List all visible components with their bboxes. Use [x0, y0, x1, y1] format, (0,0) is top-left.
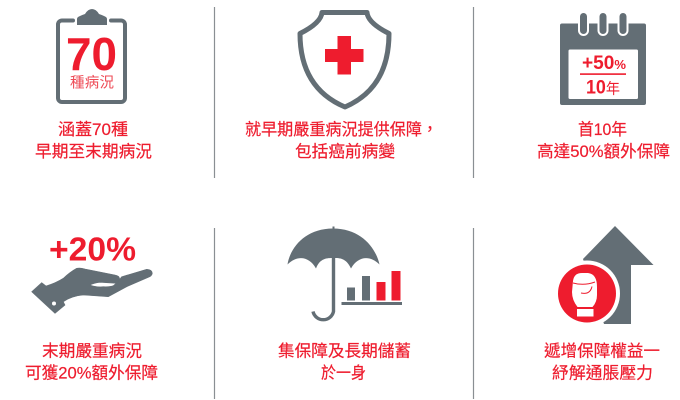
panel: protection and savings: [278, 226, 411, 382]
caption: [537, 120, 670, 161]
caption: 涵蓋70種: [58, 120, 128, 139]
icon: open hand: [32, 268, 152, 313]
caption: 於一身: [321, 364, 366, 382]
caption: [25, 342, 158, 382]
panel: first 10 years: [537, 12, 670, 161]
icon: up arrow and boxing glove: [554, 226, 654, 326]
text +50%: +50%: [582, 53, 626, 74]
icon: umbrella with bars: [288, 226, 402, 320]
caption: 末期嚴重病況: [42, 342, 142, 360]
caption: 就早期嚴重病況提供保障，: [245, 120, 438, 139]
caption: 高達50%額外保障: [537, 142, 670, 161]
caption: [245, 120, 438, 161]
icon: clipboard: [58, 9, 125, 102]
label: conditions: 種病況: [70, 74, 114, 92]
caption: [35, 120, 152, 161]
text +20%: +20%: [49, 230, 136, 268]
caption: 遞增保障權益一: [544, 342, 660, 360]
panel: inflation: [544, 226, 660, 382]
caption: 包括癌前病變: [295, 142, 395, 161]
panel: +20%: [25, 230, 158, 382]
caption: [278, 342, 411, 382]
number 70: 70: [66, 28, 117, 80]
caption: 紓解通脹壓力: [552, 364, 653, 382]
text 10 years: 10年: [586, 78, 620, 98]
caption: 早期至末期病況: [35, 142, 152, 161]
caption: 首10年: [578, 120, 627, 139]
caption: [544, 342, 660, 382]
caption: 可獲20%額外保障: [25, 364, 158, 382]
caption: 集保障及長期儲蓄: [278, 342, 411, 360]
icon: calendar: [560, 12, 646, 105]
icon: shield with cross: [300, 12, 389, 107]
panel: 70 conditions: [35, 9, 152, 161]
panel: early stage cover: [245, 12, 438, 161]
